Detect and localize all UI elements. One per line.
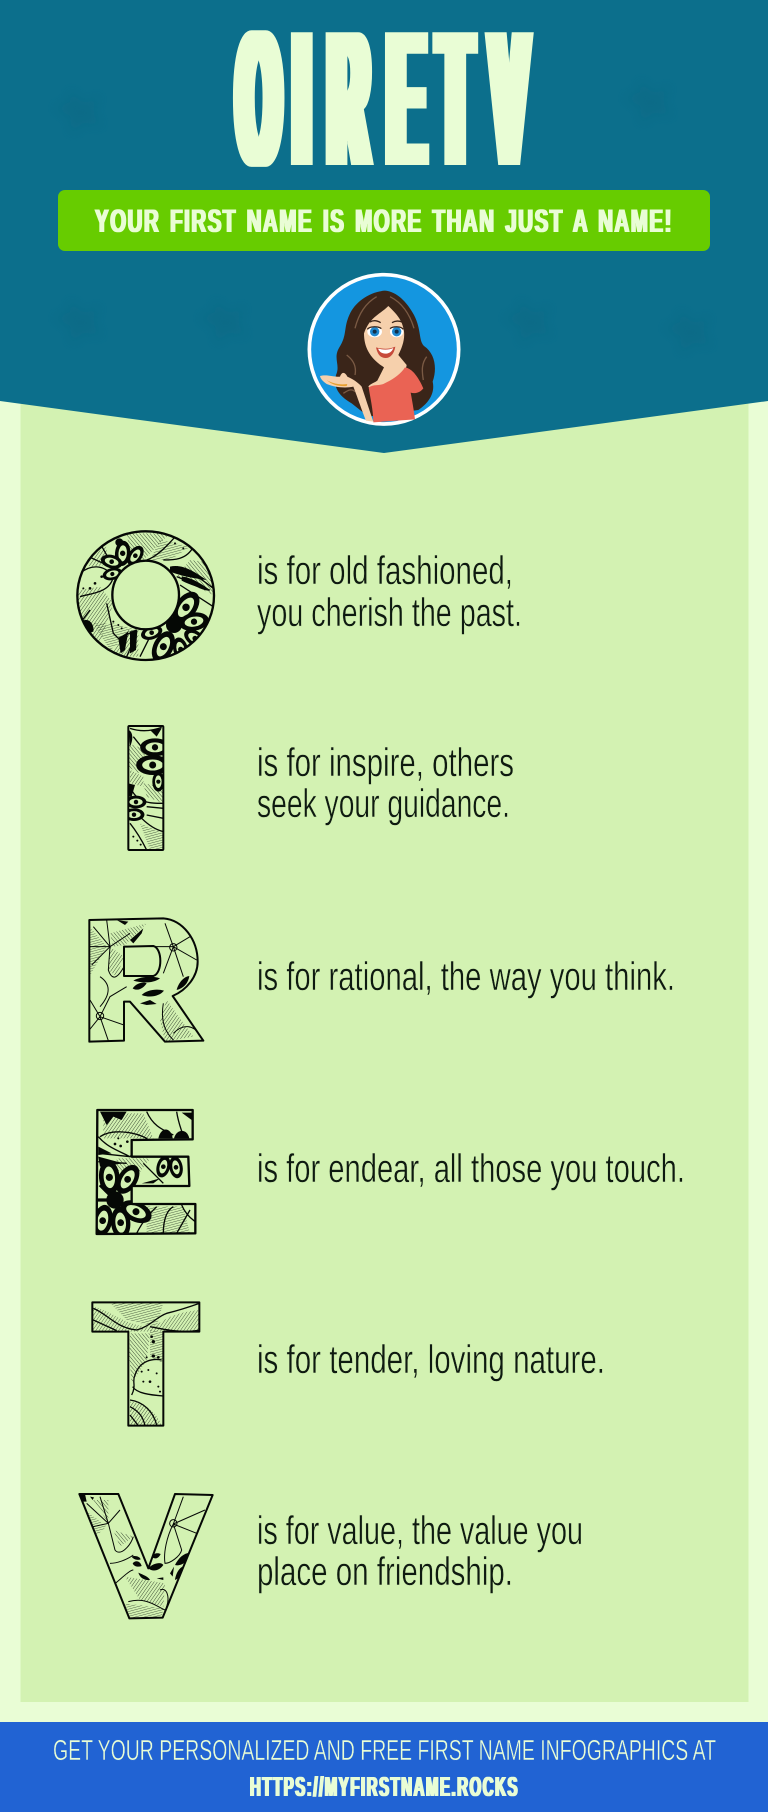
header band — [0, 0, 768, 453]
line: V text: place on friendship. — [257, 1550, 513, 1594]
line: I text: is for inspire, others — [257, 741, 514, 785]
letter I illustration — [127, 725, 164, 851]
letter E illustration — [90, 1110, 195, 1239]
line: V text: is for value, the value you — [257, 1509, 583, 1553]
avatar: cartoon woman in circle — [309, 275, 459, 424]
letter V illustration — [79, 1494, 213, 1618]
letter O illustration — [70, 531, 217, 666]
line: I text — [257, 741, 514, 826]
letter R illustration — [89, 918, 203, 1042]
line: T text: is for tender, loving nature. — [257, 1338, 605, 1382]
line: I text: seek your guidance. — [257, 782, 510, 826]
line: V text — [257, 1509, 583, 1594]
line: O text: is for old fashioned, — [257, 549, 513, 593]
line: O text — [257, 549, 522, 635]
content panel — [20, 390, 748, 1702]
line: O text: you cherish the past. — [257, 591, 522, 635]
footer url: HTTPS://MYFIRSTNAME.ROCKS — [250, 1771, 519, 1802]
letter T illustration — [92, 1302, 200, 1426]
footer — [0, 1722, 768, 1812]
banner — [58, 190, 710, 251]
